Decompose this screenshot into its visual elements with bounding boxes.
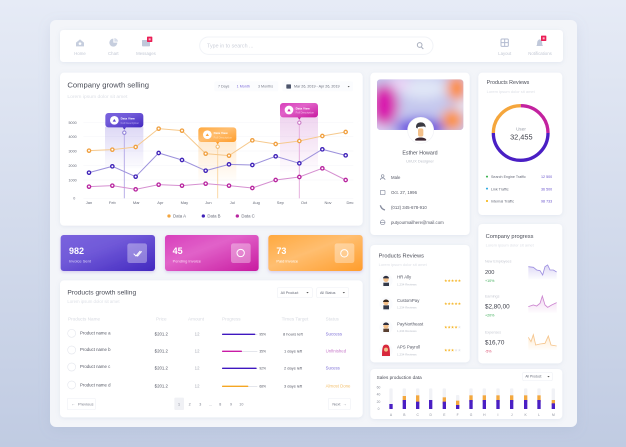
metric: new employees: +10% — [485, 279, 495, 283]
x axis labels: Apr — [157, 200, 164, 205]
x axis labels: J — [511, 413, 513, 417]
row c: 2 days left — [284, 365, 303, 370]
filter: All Product — [525, 375, 542, 379]
button: next — [328, 398, 350, 410]
table header: Products Name — [68, 316, 100, 321]
subheading: Lorem ipsum dolor sit amet — [487, 89, 536, 94]
panel: product reviews list — [370, 245, 470, 362]
row b: Product name b — [80, 347, 111, 352]
date picker: Mar 26, 2019 - Apr 26, 2019 — [294, 85, 340, 89]
row a: Product name a — [80, 330, 111, 335]
table header: Status — [326, 316, 340, 321]
tooltip: purple: Data View — [121, 117, 135, 121]
detail: gender — [380, 175, 401, 180]
x axis labels: C — [416, 413, 419, 417]
right lower group — [370, 224, 562, 419]
x axis labels: May — [181, 200, 188, 205]
detail: gender: Male — [391, 175, 401, 180]
metric: new employees: New Employees — [485, 260, 512, 264]
table header — [68, 316, 340, 321]
panel: company growth selling chart — [60, 73, 363, 226]
tooltip: purple — [105, 113, 143, 130]
heading: Sales production data — [377, 375, 422, 380]
heading: Company growth selling — [67, 81, 149, 90]
top navigation bar — [60, 30, 563, 62]
role: UI/UX Designer — [406, 159, 435, 164]
x axis labels: Oct — [301, 200, 308, 205]
review: PayNortheast: 1,234 Reviews — [397, 329, 417, 333]
range tabs — [214, 81, 278, 91]
metric: expenses: -5% — [485, 349, 492, 353]
review: APS Payroll: ★★★★★ — [444, 348, 462, 353]
row a: 95% — [259, 333, 266, 337]
heading: Products Reviews — [379, 254, 424, 260]
line: data C — [87, 167, 347, 191]
highlight columns — [105, 117, 318, 198]
y axis labels — [377, 385, 381, 411]
tooltip: purple: Full Description — [121, 121, 139, 125]
row c: Sucess — [326, 366, 340, 371]
row a: Success — [326, 332, 342, 337]
donut label — [510, 126, 533, 142]
review: APS Payroll: APS Payroll — [397, 345, 420, 350]
legend: Data B — [207, 213, 221, 218]
main panel — [50, 20, 577, 427]
y axis labels: 60 — [377, 385, 381, 389]
y axis labels: 0 — [378, 407, 380, 411]
review: HR Ally: ★★★★★ — [444, 278, 462, 283]
metric: expenses: Expenses — [485, 330, 501, 334]
table header: Amount — [188, 316, 205, 321]
x axis labels: E — [443, 413, 446, 417]
icon: home — [76, 39, 84, 46]
row d: Product name d — [80, 382, 111, 387]
metric: expenses: $16,70 — [485, 340, 505, 347]
x axis labels — [390, 413, 555, 417]
date picker — [282, 81, 353, 91]
row b: $201.2 — [155, 348, 168, 353]
label: chart: Chart — [108, 51, 119, 56]
x axis labels: D — [429, 413, 432, 417]
right upper group — [365, 36, 562, 235]
invoice card: paid — [268, 235, 363, 271]
legend — [167, 213, 255, 218]
y axis labels: 2000 — [69, 164, 77, 168]
metric: earnings: Earnings — [485, 294, 500, 298]
invoice card: sent: Invoice Sent — [69, 258, 92, 263]
search box: Type in to search ... — [207, 44, 253, 50]
row b: 35% — [259, 350, 266, 354]
y axis labels: 5000 — [69, 121, 77, 125]
x axis labels: A — [390, 413, 393, 417]
y axis labels: 0 — [73, 197, 75, 201]
panel: product reviews donut — [478, 73, 562, 215]
row c: 92% — [259, 367, 266, 371]
grid lines — [83, 123, 353, 198]
table header: Price — [156, 316, 167, 321]
tooltip: magenta: Full Description — [296, 111, 314, 115]
tooltip: magenta — [280, 103, 318, 120]
detail: email: putyourmailhere@mail.com — [391, 220, 444, 225]
x axis labels: H — [483, 413, 486, 417]
review: PayNortheast: ★★★★★ — [444, 324, 462, 329]
x axis labels: Jan — [86, 200, 92, 205]
y axis labels: 4000 — [69, 135, 77, 139]
button: previous: ← — [71, 401, 75, 406]
review: CustomPay: CustomPay — [397, 298, 420, 303]
tooltip: orange — [198, 127, 236, 144]
traffic legend: 98 733 — [541, 199, 552, 203]
y axis labels — [69, 121, 77, 201]
donut chart — [493, 106, 548, 160]
tooltip: magenta: Data View — [296, 106, 310, 110]
traffic legend: Internal Traffic — [491, 199, 514, 203]
row d: 12 — [195, 383, 200, 388]
label: layout: Layout — [498, 51, 512, 56]
x axis labels: M — [552, 413, 555, 417]
bar chart — [389, 388, 555, 409]
invoice card: pending — [165, 235, 259, 271]
row d: Almost Done — [326, 384, 351, 389]
x axis labels — [86, 200, 354, 205]
button: previous: Previous — [78, 401, 94, 406]
metric: new employees — [485, 260, 557, 283]
filters — [277, 288, 349, 298]
row a — [68, 329, 342, 337]
heading: Company progress — [486, 234, 534, 240]
y axis labels: 3000 — [69, 149, 77, 153]
row b: 12 — [195, 348, 200, 353]
x axis labels: F — [457, 413, 459, 417]
detail: birthday: Oct. 27, 1996 — [391, 190, 418, 195]
metric: earnings: +20% — [485, 313, 495, 317]
metric: earnings: $2,80,00 — [485, 304, 510, 311]
pagination — [174, 398, 243, 410]
name: Esther Howard — [402, 150, 438, 156]
x axis labels: I — [498, 413, 499, 417]
left column top — [60, 30, 563, 226]
lower left group — [60, 235, 363, 417]
detail: birthday — [380, 190, 418, 195]
metric: earnings — [485, 294, 557, 317]
traffic legend — [486, 175, 552, 203]
filters: All Status — [320, 291, 336, 295]
donut label: 32,455 — [510, 133, 533, 142]
row a: $201.2 — [155, 332, 168, 337]
legend: Data A — [173, 213, 186, 218]
y axis labels: 20 — [377, 400, 381, 404]
button: next: → — [343, 401, 347, 406]
invoice card: pending: Pending Invoice — [173, 258, 202, 263]
donut label: User — [516, 126, 526, 131]
row b: Unfinished — [326, 349, 347, 354]
row c: $201.2 — [155, 365, 168, 370]
y axis labels: 40 — [377, 392, 381, 396]
range tabs: 3 Months — [258, 85, 273, 89]
review: PayNortheast — [379, 321, 462, 334]
row c: Product name c — [80, 364, 111, 369]
row d: 3 days left — [284, 383, 303, 388]
line: data A — [87, 127, 347, 157]
row a: 12 — [195, 332, 200, 337]
range tabs: 7 Days — [218, 85, 230, 89]
y axis labels: 1000 — [69, 178, 77, 182]
row d: 68% — [259, 385, 266, 389]
x axis labels: Mar — [133, 200, 140, 205]
button: next: Next — [332, 401, 341, 406]
row d: $201.2 — [155, 383, 168, 388]
traffic legend: 36 500 — [541, 187, 552, 191]
invoice card: pending: 45 — [173, 246, 183, 256]
row c — [68, 363, 340, 371]
metric: new employees: 200 — [485, 270, 494, 276]
panel: company progress — [478, 224, 562, 363]
search box — [200, 37, 433, 54]
search icon — [417, 43, 423, 49]
row b: 1 days left — [284, 348, 303, 353]
traffic legend: Link Traffic — [491, 187, 509, 191]
pagination: 9 — [230, 402, 232, 406]
icon: layout — [501, 39, 508, 46]
invoice card: paid: Paid Invoice — [276, 258, 299, 263]
label: notifications: Notifications — [528, 51, 552, 56]
metric: expenses — [485, 330, 557, 353]
legend: Data C — [241, 213, 255, 218]
filter — [523, 372, 552, 381]
x axis labels: K — [525, 413, 528, 417]
row c: 12 — [195, 365, 200, 370]
pagination: 1 — [178, 402, 180, 406]
row d — [68, 381, 351, 389]
pagination: 10 — [239, 402, 243, 406]
x axis labels: Aug — [253, 200, 260, 205]
subheading: Lorem ipsum dolor sit amet — [486, 242, 535, 247]
avatar — [408, 117, 434, 143]
review: PayNortheast: PayNortheast — [397, 321, 424, 326]
row b — [68, 346, 347, 354]
panel: profile — [370, 73, 470, 236]
traffic legend: Search Engine Traffic — [491, 175, 526, 179]
x axis labels: Nov — [324, 200, 332, 205]
x axis labels: L — [538, 413, 540, 417]
pagination: 2 — [189, 402, 191, 406]
traffic legend: 12 500 — [541, 175, 552, 179]
x axis labels: B — [403, 413, 406, 417]
heading: Products Reviews — [487, 80, 530, 86]
panel: sales production data — [370, 369, 562, 419]
review: CustomPay: 1,234 Reviews — [397, 306, 417, 310]
table header: Progress — [222, 316, 241, 321]
profile banner — [377, 79, 464, 130]
label: home: Home — [74, 51, 86, 56]
row a: 8 hours left — [283, 331, 304, 336]
review: APS Payroll — [379, 344, 462, 357]
subheading: Lorem ipsum dolor sit amet — [67, 299, 120, 304]
x axis labels: Jul — [230, 200, 235, 205]
x axis labels: Jun — [205, 200, 212, 205]
x axis labels: Sep — [277, 200, 285, 205]
pagination: 3 — [199, 402, 201, 406]
icon: chart — [109, 38, 118, 47]
tooltip points — [123, 121, 301, 148]
subheading: Lorem ipsum dolor sit amet — [379, 262, 428, 267]
heading: Products growth selling — [67, 289, 136, 296]
label: messages: Messages — [136, 51, 156, 56]
invoice card: paid: 73 — [276, 246, 286, 256]
tooltip: orange: Full Description — [214, 135, 232, 139]
tooltip: orange: Data View — [214, 131, 228, 135]
line: data B — [87, 148, 347, 178]
review: HR Ally: HR Ally — [397, 275, 412, 280]
invoice card: sent: 982 — [69, 246, 84, 256]
nav: layout and notifications — [417, 36, 552, 56]
icon: messages — [142, 37, 152, 46]
review: CustomPay: ★★★★★ — [444, 301, 462, 306]
detail: phone: (012) 345-678-910 — [391, 205, 427, 210]
pagination: 8 — [219, 402, 221, 406]
panel: products growth selling table — [60, 280, 363, 417]
x axis labels: Feb — [109, 200, 117, 205]
review: CustomPay — [379, 297, 462, 311]
pagination: ... — [209, 402, 212, 406]
subheading: Lorem ipsum dolor sit amet — [67, 94, 128, 100]
icon: bell — [536, 36, 546, 46]
x axis labels: Dec — [346, 200, 354, 205]
invoice card: sent — [61, 235, 155, 271]
review: APS Payroll: 1,234 Reviews — [397, 352, 417, 356]
button: previous — [67, 398, 95, 410]
filters: All Product — [281, 291, 298, 295]
table header: Times Target — [282, 316, 309, 321]
review: HR Ally — [379, 274, 462, 287]
x axis labels: G — [470, 413, 473, 417]
range tabs: 1 Month — [237, 85, 250, 89]
review: HR Ally: 1,234 Reviews — [397, 282, 417, 286]
